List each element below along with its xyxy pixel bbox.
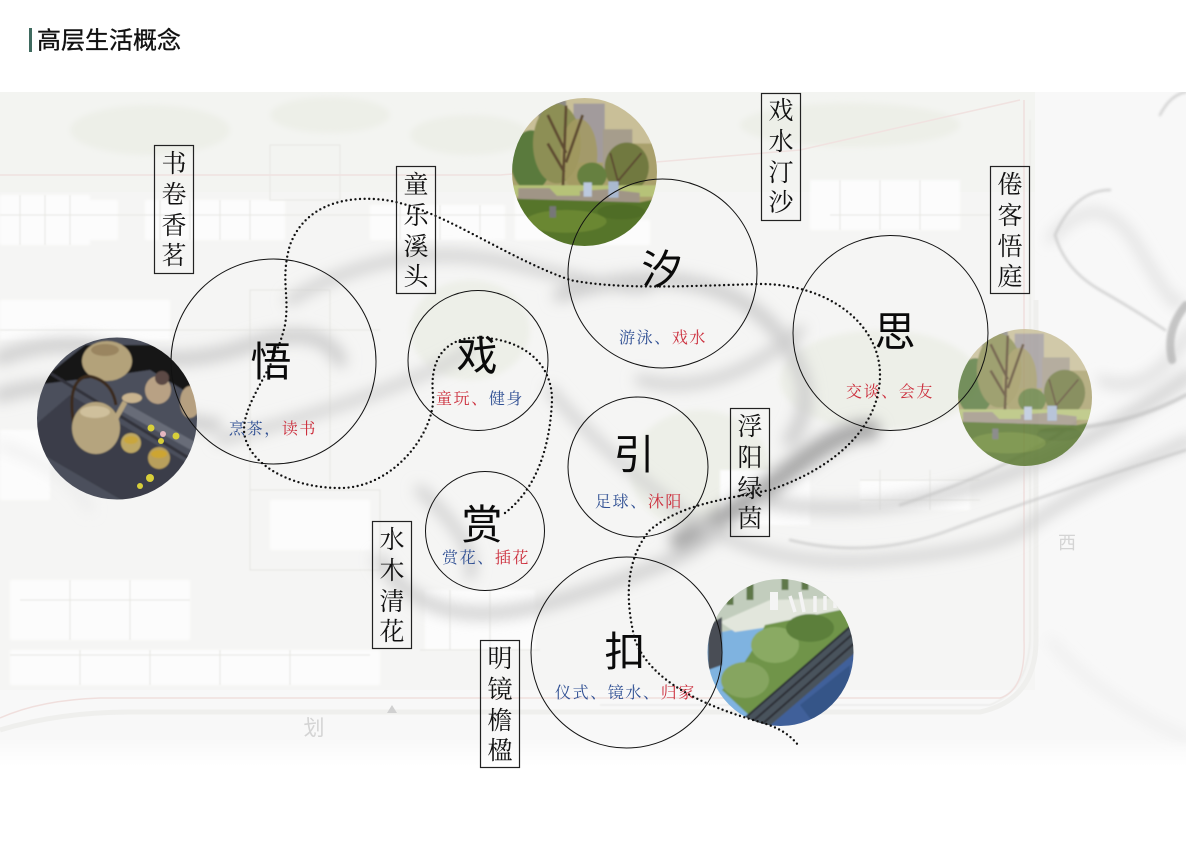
label: 浮阳绿茵: 茵 <box>737 499 763 535</box>
circle: 引: 足球、沐阳 <box>595 489 683 512</box>
circle: 扣: 仪式、镜水、归家 <box>555 680 696 703</box>
label: 书卷香茗: 茗 <box>161 236 187 272</box>
map marker <box>387 705 397 713</box>
label: 明镜檐楹: 镜 <box>487 670 513 706</box>
label: 戏水汀沙: 沙 <box>768 183 794 219</box>
title: 高层生活概念 <box>37 20 181 56</box>
label: 浮阳绿茵: 浮 <box>737 407 763 443</box>
label: 明镜檐楹: 檐 <box>487 701 513 737</box>
photo: lake <box>708 579 854 726</box>
label: 明镜檐楹: 楹 <box>487 731 513 767</box>
label: 水木清花: 清 <box>379 582 405 618</box>
circle: 戏: 童玩、健身 <box>436 386 524 409</box>
circle: 引: 引 <box>614 421 654 481</box>
circle: 赏 <box>426 472 544 590</box>
label: 童乐溪头: 乐 <box>403 196 429 232</box>
label: 戏水汀沙: 汀 <box>768 153 794 189</box>
label: 水木清花: 水 <box>379 520 405 556</box>
label: 童乐溪头: 头 <box>403 257 429 293</box>
label: 倦客悟庭 <box>990 165 1030 294</box>
circle: 引 <box>568 397 708 537</box>
label: 倦客悟庭: 悟 <box>997 227 1023 263</box>
photo: tea set <box>35 335 200 505</box>
circle: 赏: 赏花、插花 <box>442 545 530 568</box>
circle: 扣: 扣 <box>604 618 646 678</box>
circle: 悟 <box>171 259 376 464</box>
label: 书卷香茗: 卷 <box>161 175 187 211</box>
circle: 思: 思 <box>874 298 916 358</box>
label: 倦客悟庭: 客 <box>997 196 1023 232</box>
circle: 戏 <box>408 290 548 430</box>
circle: 戏: 戏 <box>456 322 498 382</box>
label: 浮阳绿茵: 阳 <box>737 438 763 474</box>
circle: 汐 <box>568 179 757 368</box>
circle: 悟: 烹茶，读书 <box>229 416 317 439</box>
label: 书卷香茗: 香 <box>161 206 187 242</box>
photo: park right <box>956 327 1094 467</box>
circle: 思: 交谈、会友 <box>846 379 934 402</box>
label: 浮阳绿茵 <box>730 407 770 536</box>
label: 倦客悟庭: 倦 <box>997 165 1023 201</box>
map label: west: 西 <box>1058 529 1076 555</box>
circle: 赏: 赏 <box>462 491 502 551</box>
circle: 汐: 汐 <box>642 236 682 296</box>
label: 戏水汀沙: 水 <box>768 122 794 158</box>
label: 童乐溪头: 童 <box>403 165 429 201</box>
label: 戏水汀沙: 戏 <box>768 91 794 127</box>
circle: 扣 <box>531 557 722 748</box>
circle: 悟: 悟 <box>250 328 292 388</box>
label: 倦客悟庭: 庭 <box>997 257 1023 293</box>
label: 书卷香茗: 书 <box>161 144 187 180</box>
label: 书卷香茗 <box>154 144 194 274</box>
label: 戏水汀沙 <box>762 91 800 220</box>
label: 童乐溪头: 溪 <box>403 227 429 263</box>
map label: plan: 划 <box>304 712 324 742</box>
label: 明镜檐楹 <box>480 639 520 768</box>
label: 童乐溪头 <box>396 165 436 294</box>
label: 明镜檐楹: 明 <box>487 639 513 675</box>
circle: 思 <box>793 236 988 430</box>
label: 浮阳绿茵: 绿 <box>737 469 763 505</box>
circle: 汐: 游泳、戏水 <box>619 325 707 348</box>
label: 水木清花 <box>372 520 412 648</box>
dotted route <box>244 199 880 745</box>
photo: park top <box>511 96 658 248</box>
label: 水木清花: 木 <box>379 551 405 587</box>
label: 水木清花: 花 <box>379 612 405 648</box>
